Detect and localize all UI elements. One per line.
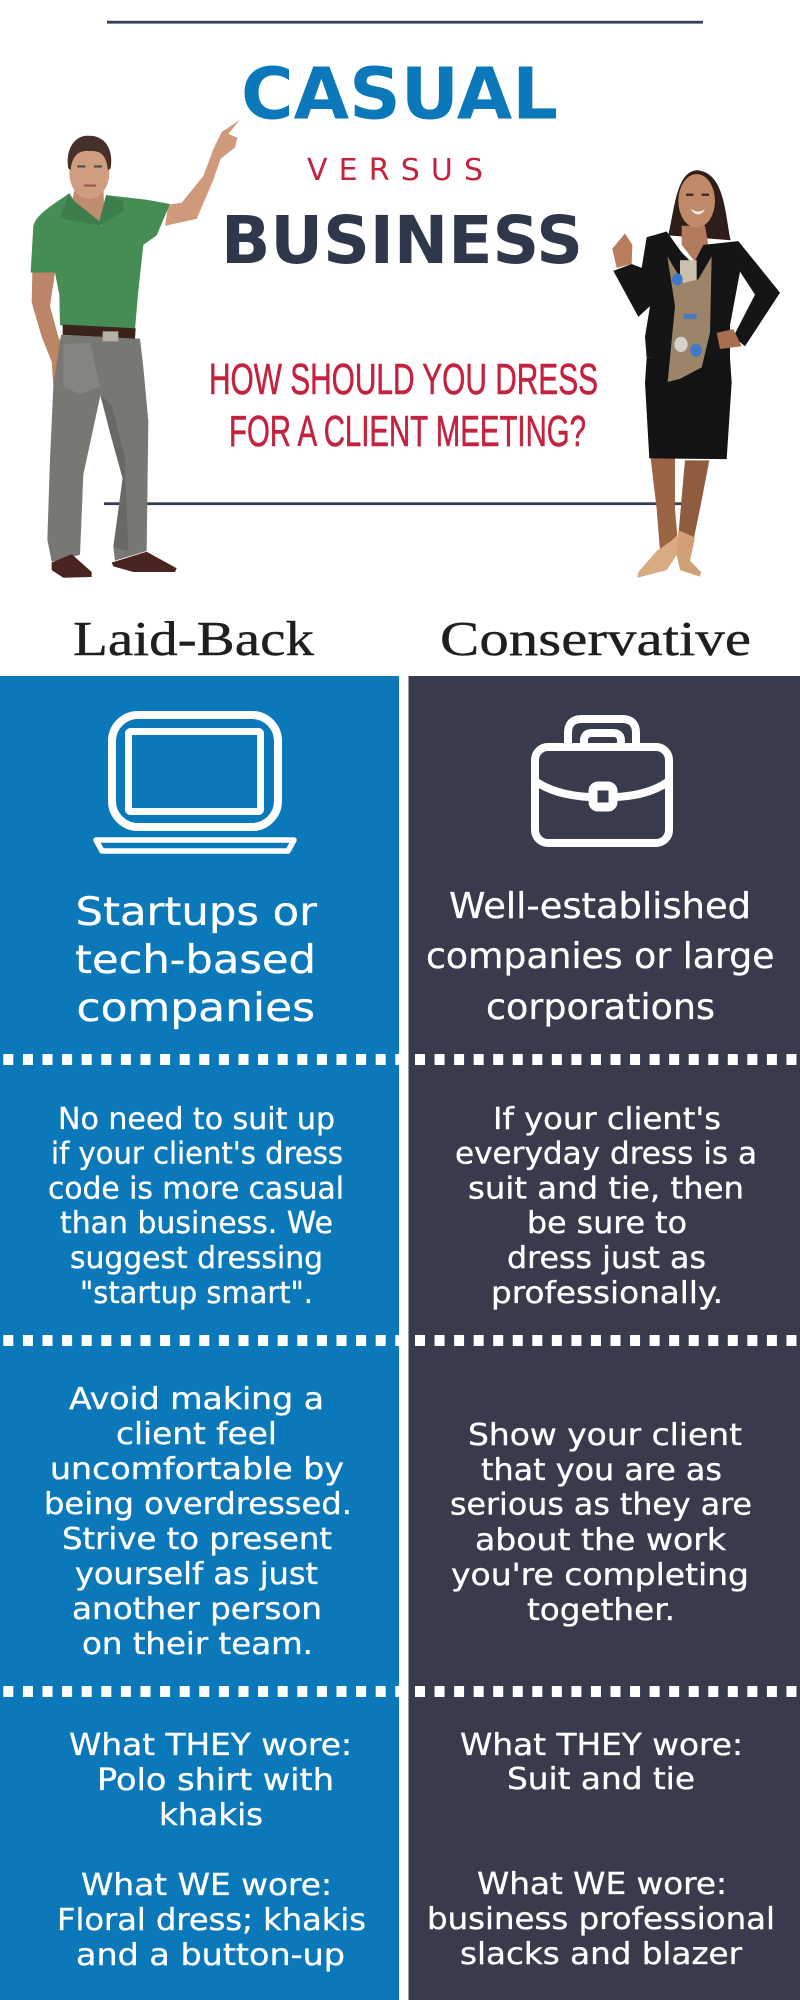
casual advice text: client feel <box>116 1417 277 1452</box>
business what we wore text: business professional <box>427 1902 775 1937</box>
business what we wore text: What WE wore: <box>477 1867 727 1902</box>
casual advice text: uncomfortable by <box>50 1452 344 1487</box>
casual what we wore text: Floral dress; khakis <box>57 1903 366 1938</box>
casual dress code text: if your client's dress <box>51 1136 343 1172</box>
business what they wore text: What THEY wore: <box>460 1728 743 1763</box>
casual dress code text: No need to suit up <box>58 1102 335 1137</box>
casual what they wore text: What THEY wore: <box>69 1728 352 1763</box>
business audience text: companies or large <box>426 936 774 977</box>
subtitle question: FOR A CLIENT MEETING? <box>229 408 586 456</box>
business advice text: together. <box>527 1593 675 1628</box>
business audience text: Well-established <box>449 886 751 927</box>
casual what we wore text: and a button-up <box>76 1938 345 1973</box>
icon: laptop <box>96 715 294 851</box>
title: casual: CASUAL <box>241 52 558 136</box>
subtitle question <box>209 356 598 456</box>
business what they wore text: Suit and tie <box>507 1762 695 1797</box>
business advice text <box>450 1418 752 1628</box>
casual dress code text <box>48 1102 344 1311</box>
casual what they wore text <box>69 1728 352 1833</box>
casual advice text: another person <box>72 1592 322 1627</box>
casual audience text <box>75 890 318 1031</box>
business advice text: serious as they are <box>450 1488 752 1522</box>
business what we wore text: slacks and blazer <box>460 1937 743 1972</box>
business dress code text: suit and tie, then <box>468 1172 744 1206</box>
business dress code text: everyday dress is a <box>455 1136 757 1172</box>
casual advice text: on their team. <box>82 1627 313 1662</box>
title block <box>221 52 583 279</box>
casual what we wore text <box>57 1868 366 1973</box>
casual audience text: tech-based <box>75 938 316 983</box>
casual advice text: Avoid making a <box>69 1382 324 1417</box>
top rule <box>107 21 703 24</box>
business advice text: that you are as <box>481 1453 722 1488</box>
bottom header rule <box>104 502 683 505</box>
casual advice text: Strive to present <box>62 1522 332 1557</box>
casual dress code text: "startup smart". <box>80 1276 313 1311</box>
subtitle question: HOW SHOULD YOU DRESS <box>209 356 598 404</box>
business dress code text: dress just as <box>507 1241 706 1276</box>
casual advice text: being overdressed. <box>44 1487 352 1522</box>
casual dress code text: than business. We <box>60 1206 333 1241</box>
panel: business column <box>408 676 800 2000</box>
casual audience text: companies <box>76 986 315 1031</box>
business dress code text <box>455 1102 757 1311</box>
business advice text: about the work <box>475 1523 727 1558</box>
casual audience text: Startups or <box>76 890 318 935</box>
business advice text: Show your client <box>468 1418 742 1453</box>
business what we wore text <box>427 1867 775 1972</box>
panel: casual column <box>0 676 399 2000</box>
man in green polo pointing at title <box>31 120 240 578</box>
casual what they wore text: khakis <box>159 1798 263 1833</box>
casual advice text: yourself as just <box>75 1557 318 1592</box>
title: versus: VERSUS <box>307 153 483 188</box>
casual dress code text: code is more casual <box>48 1172 344 1206</box>
title: business: BUSINESS <box>221 202 583 279</box>
column heading: conservative: Conservative <box>440 611 751 666</box>
casual dress code text: suggest dressing <box>70 1241 323 1276</box>
business dress code text: If your client's <box>493 1102 721 1137</box>
casual what we wore text: What WE wore: <box>81 1868 332 1903</box>
casual advice text <box>44 1382 352 1662</box>
business audience text: corporations <box>486 987 715 1028</box>
icon: briefcase <box>535 719 669 843</box>
casual what they wore text: Polo shirt with <box>97 1763 334 1798</box>
business audience text <box>426 886 774 1028</box>
woman in black suit <box>612 170 780 578</box>
business dress code text: be sure to <box>527 1206 687 1241</box>
business dress code text: professionally. <box>491 1276 723 1311</box>
business advice text: you're completing <box>451 1558 749 1593</box>
column heading: laid-back: Laid-Back <box>73 611 315 666</box>
business what they wore text <box>460 1728 743 1797</box>
